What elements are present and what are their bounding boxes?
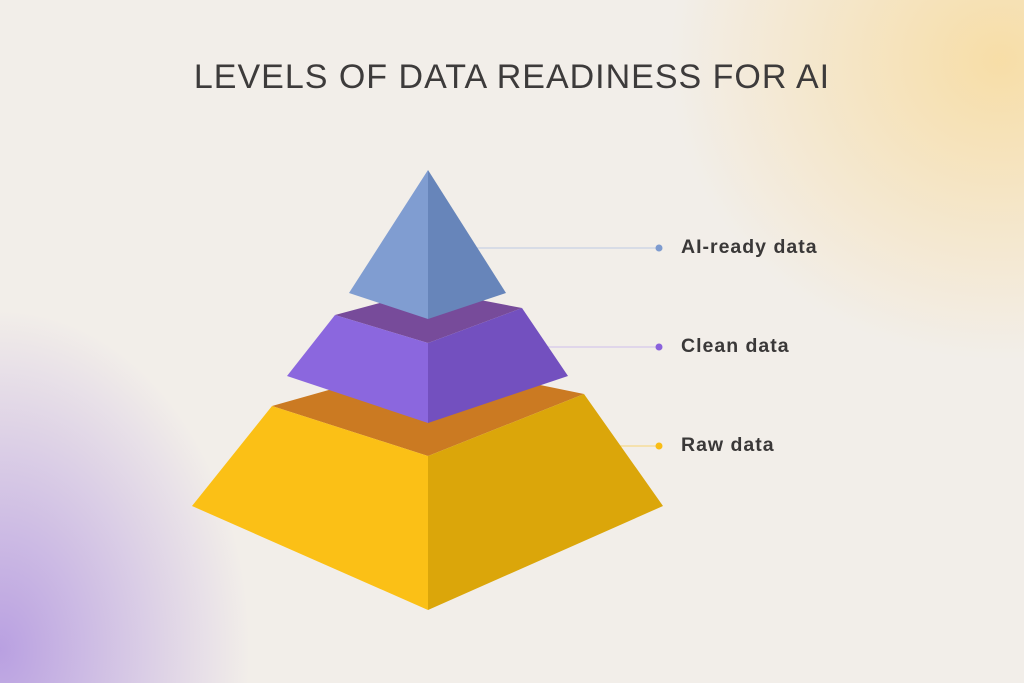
title: LEVELS OF DATA READINESS FOR AI xyxy=(194,58,830,96)
label: clean data: Clean data xyxy=(681,335,790,357)
label: raw data: Raw data xyxy=(681,434,775,456)
pyramid level: raw data xyxy=(192,362,663,610)
pyramid level: clean data xyxy=(287,290,568,423)
connector lines xyxy=(465,244,662,450)
label: AI-ready data: AI-ready data xyxy=(681,236,818,258)
pyramid level: AI-ready data xyxy=(349,170,506,319)
